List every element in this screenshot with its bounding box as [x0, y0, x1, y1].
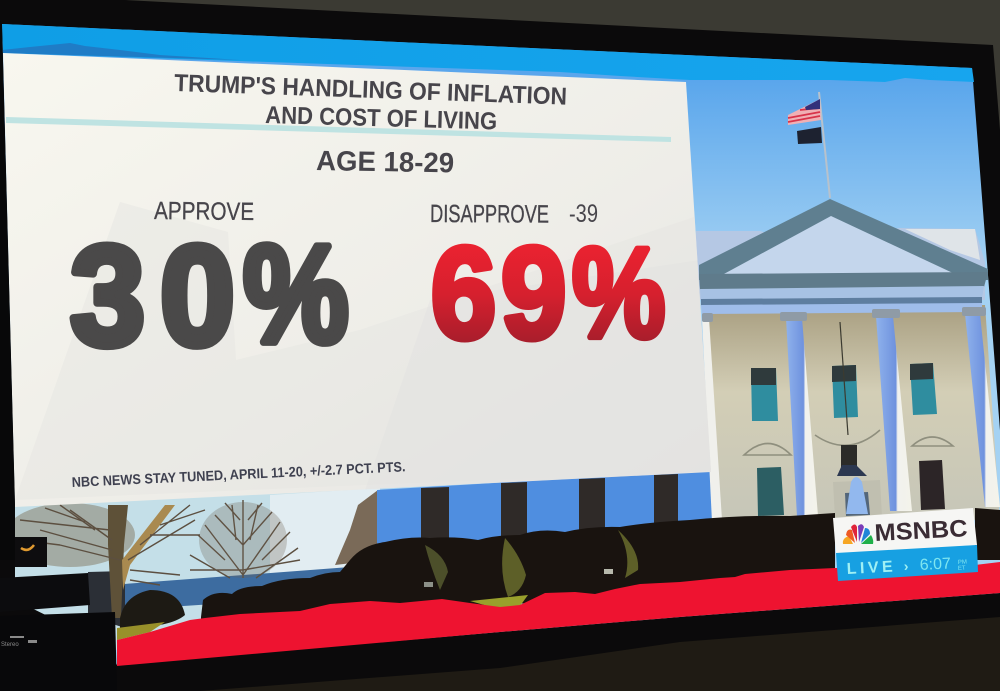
disapprove value: % [572, 221, 665, 364]
trees and garden [5, 488, 380, 650]
portico wall [702, 305, 1000, 522]
left bezel and devices: Stereo [1, 642, 19, 648]
flagpole and flags [788, 92, 830, 198]
White House upper facade [696, 199, 1000, 522]
approve value: 30 [70, 217, 235, 375]
entablature [699, 272, 988, 290]
disapprove value: 69 [431, 220, 567, 366]
door arches [744, 430, 953, 455]
title: AND COST OF LIVING [265, 102, 497, 135]
roof parapet [696, 228, 985, 300]
POW flag [797, 127, 822, 144]
live time: LIVE [846, 559, 893, 578]
capitals [702, 307, 986, 322]
lantern [837, 322, 867, 476]
American flag [788, 99, 821, 125]
disapprove value [431, 220, 665, 366]
logo text: MSNBC [874, 515, 968, 547]
source note: NBC NEWS STAY TUNED, APRIL 11-20, +/-2.7 PCT. PTS. [71, 458, 406, 490]
subheading: age group: AGE 18-29 [316, 145, 454, 178]
White House lower facade [377, 470, 716, 560]
disapprove label: DISAPPROVE [430, 200, 549, 229]
icon: NBC peacock [843, 524, 873, 544]
blue top band [2, 24, 974, 82]
MSNBC live bug: 6:07 [919, 555, 951, 574]
margin: -39 [569, 200, 598, 228]
hedges [117, 508, 1000, 640]
MSNBC live bug [833, 508, 978, 581]
red torn band [117, 562, 1000, 666]
approve value [70, 217, 349, 375]
MSNBC live bug: ET [958, 566, 966, 572]
columns [702, 318, 722, 522]
windows [751, 368, 778, 421]
approve value: % [243, 217, 349, 372]
MSNBC live bug: › [903, 558, 909, 574]
left bezel and devices [0, 20, 117, 691]
approve label: APPROVE [154, 197, 254, 226]
title [174, 70, 567, 135]
panel watermark shapes [414, 218, 704, 482]
title: TRUMP'S HANDLING OF INFLATION [174, 70, 567, 111]
pediment [699, 199, 988, 280]
MSNBC live bug: PM [958, 560, 967, 566]
panel: poll card [3, 53, 711, 507]
fountain [846, 477, 868, 514]
divider line [6, 117, 671, 142]
